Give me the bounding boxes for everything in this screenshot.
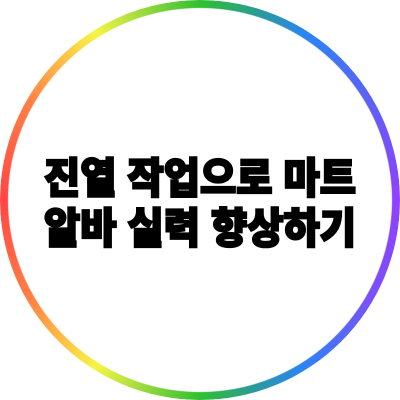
- title line 1: 진열 작업으로 마트: [44, 155, 356, 202]
- title line 2: 알바 실력 향상하기: [44, 205, 356, 252]
